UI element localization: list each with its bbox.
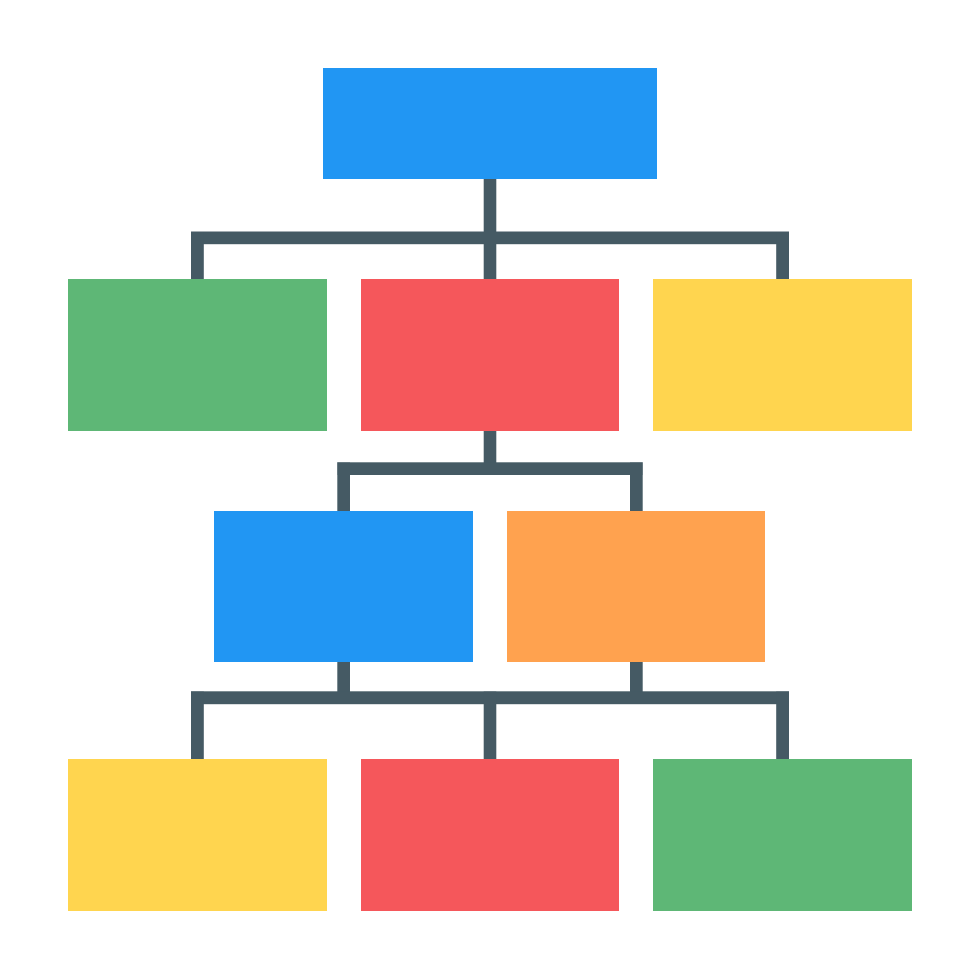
connectors: red box to third row (337, 431, 643, 511)
second row box: green (68, 279, 327, 431)
third row box: orange (507, 511, 765, 662)
second row box: yellow (653, 279, 912, 431)
second row box: red (361, 279, 619, 431)
third row box: blue (214, 511, 473, 662)
bottom row box: red (361, 759, 619, 911)
bottom row box: yellow (68, 759, 327, 911)
connectors: top level to second row (191, 179, 789, 279)
top box: blue (323, 68, 657, 179)
bottom row box: green (653, 759, 912, 911)
connectors: third row to bottom row (191, 662, 789, 759)
